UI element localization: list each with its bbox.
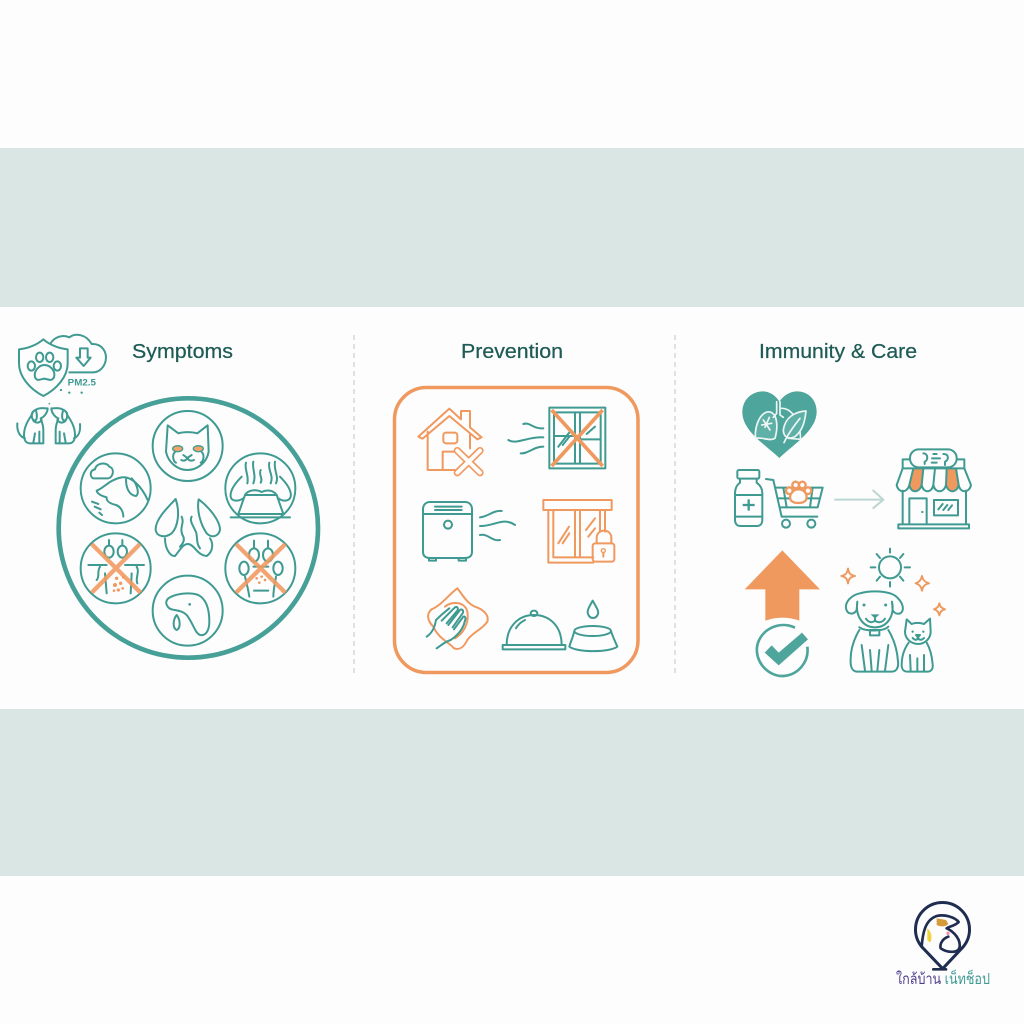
icon: crossed paws: [225, 533, 295, 603]
logo: pet shop location pin: [896, 902, 990, 988]
heading: Prevention: Prevention: [461, 341, 563, 363]
prevention artwork: [418, 408, 617, 651]
icon: two dogs facing each other: [17, 403, 80, 443]
icon: happy cat: [902, 619, 933, 672]
panel: immunity and care: [735, 341, 971, 676]
icon: water bowl with drop: [569, 601, 617, 651]
icon: house with X: [418, 409, 482, 473]
icon: watery cat eyes: [153, 411, 223, 481]
icon: medicine bottle: [735, 470, 762, 526]
panel: symptoms: [17, 335, 318, 658]
big symptoms circle: [59, 398, 318, 658]
bottom band: [0, 709, 1024, 876]
arrow: big orange up arrow: [745, 550, 820, 621]
icon: shield with paw and PM2.5 cloud: PM2.5: [68, 378, 96, 388]
icon: orange sparkles: [841, 569, 945, 615]
symptoms artwork: [17, 335, 318, 658]
heading: Immunity & Care: Immunity & Care: [759, 341, 917, 363]
icon: central nose: [156, 499, 220, 556]
icon: hand wiping cloth: [427, 588, 488, 649]
icon: air purifier: [423, 502, 515, 561]
icon: check mark circle: [757, 625, 808, 676]
arrow: cart to store: [834, 490, 883, 509]
icon: pet store: [897, 449, 971, 528]
icon: coughing dog with cloud: [81, 453, 151, 523]
logo text: ใกล้บ้าน เน็ทช็อป: [896, 969, 990, 988]
icon: crossed chest irritation: [81, 533, 151, 603]
top band: [0, 148, 1024, 307]
icon: drooling dog head: [153, 576, 223, 646]
panel: prevention: [394, 341, 638, 672]
icon: happy dog: [846, 591, 903, 672]
icon: sun: [871, 549, 910, 587]
icon: heart with lungs and leaf: [742, 391, 817, 458]
heading: Symptoms: Symptoms: [132, 341, 233, 363]
prevention orange rounded frame: [394, 388, 638, 672]
icon: locked window: [543, 500, 614, 563]
icon: food bowl with smell: [225, 453, 295, 523]
immunity artwork: [735, 391, 971, 676]
icon: covered food dome: [503, 611, 565, 649]
icon: shopping cart with paw: [766, 479, 823, 528]
icon: air blowing into crossed window: [508, 408, 605, 468]
icon: shield with paw and PM2.5 cloud: [19, 335, 106, 396]
